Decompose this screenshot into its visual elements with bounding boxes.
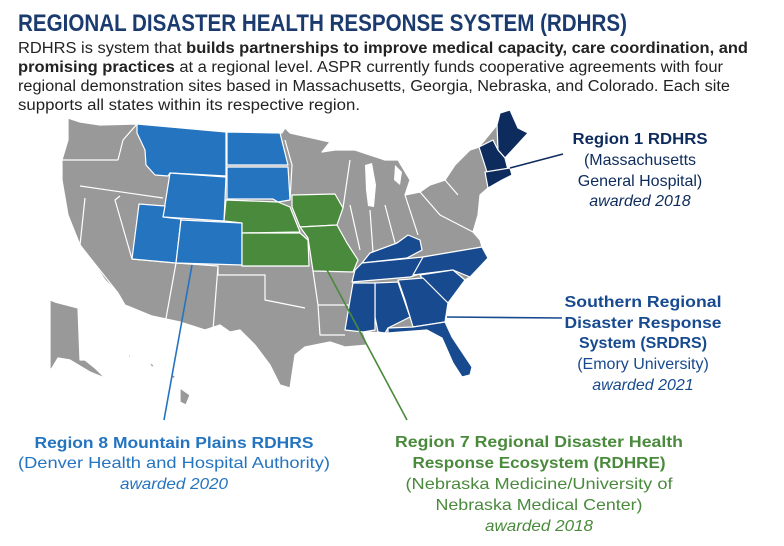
region 7: rdhre: [224, 194, 358, 272]
callout: region 7: awarded 2018: [485, 518, 593, 535]
callout: region 8: Region 8 Mountain Plains RDHRS: [34, 435, 314, 452]
callout: region 7: (Nebraska Medicine/University of: [406, 476, 673, 493]
southern region: [345, 235, 488, 377]
callout: region 8: awarded 2020: [120, 476, 228, 493]
callout: region 1: awarded 2018: [589, 193, 691, 210]
callout: region 7: [395, 434, 683, 535]
intro text block: supports all states within its respective region.: [18, 97, 360, 114]
callout: region 7: Response Ecosystem (RDHRE): [412, 455, 666, 472]
intro text block: regional demonstration sites based in Massachusetts, Georgia, Nebraska, and Colorado. Each site: [18, 78, 730, 95]
callout: region 7: Nebraska Medical Center): [436, 497, 642, 514]
intro text block: promising practices at a regional level. ASPR currently funds cooperative agreements with four: [18, 59, 723, 76]
callout: region 8: (Denver Health and Hospital Authority): [18, 455, 330, 472]
callout: region 1: Region 1 RDHRS: [572, 131, 708, 148]
leader lines: [164, 154, 563, 420]
callout: southern region: Southern Regional: [564, 294, 722, 311]
intro text block: RDHRS is system that builds partnerships to improve medical capacity, care coordination, and: [18, 40, 748, 57]
callout: region 1: [572, 131, 708, 210]
callout: southern region: Disaster Response: [564, 315, 722, 332]
gray base states: [62, 110, 528, 388]
callout: region 1: (Massachusetts: [584, 152, 696, 169]
lakes: [365, 163, 376, 207]
region 1: new england: [479, 110, 528, 188]
callout: southern region: awarded 2021: [592, 377, 694, 394]
intro text block: [18, 40, 748, 114]
region 8: mountain plains: [132, 124, 290, 265]
callout: southern region: [564, 294, 722, 394]
callout: region 7: Region 7 Regional Disaster Health: [395, 434, 683, 451]
callout: region 8: [18, 435, 330, 493]
callout: region 1: General Hospital): [578, 173, 702, 190]
callout: southern region: (Emory University): [577, 356, 709, 373]
map: united states: [50, 110, 528, 405]
alaska and hawaii: [50, 300, 190, 405]
gray state lines: [62, 124, 473, 335]
title: REGIONAL DISASTER HEALTH RESPONSE SYSTEM (RDHRS): [18, 10, 627, 37]
callout: southern region: System (SRDRS): [579, 335, 707, 352]
